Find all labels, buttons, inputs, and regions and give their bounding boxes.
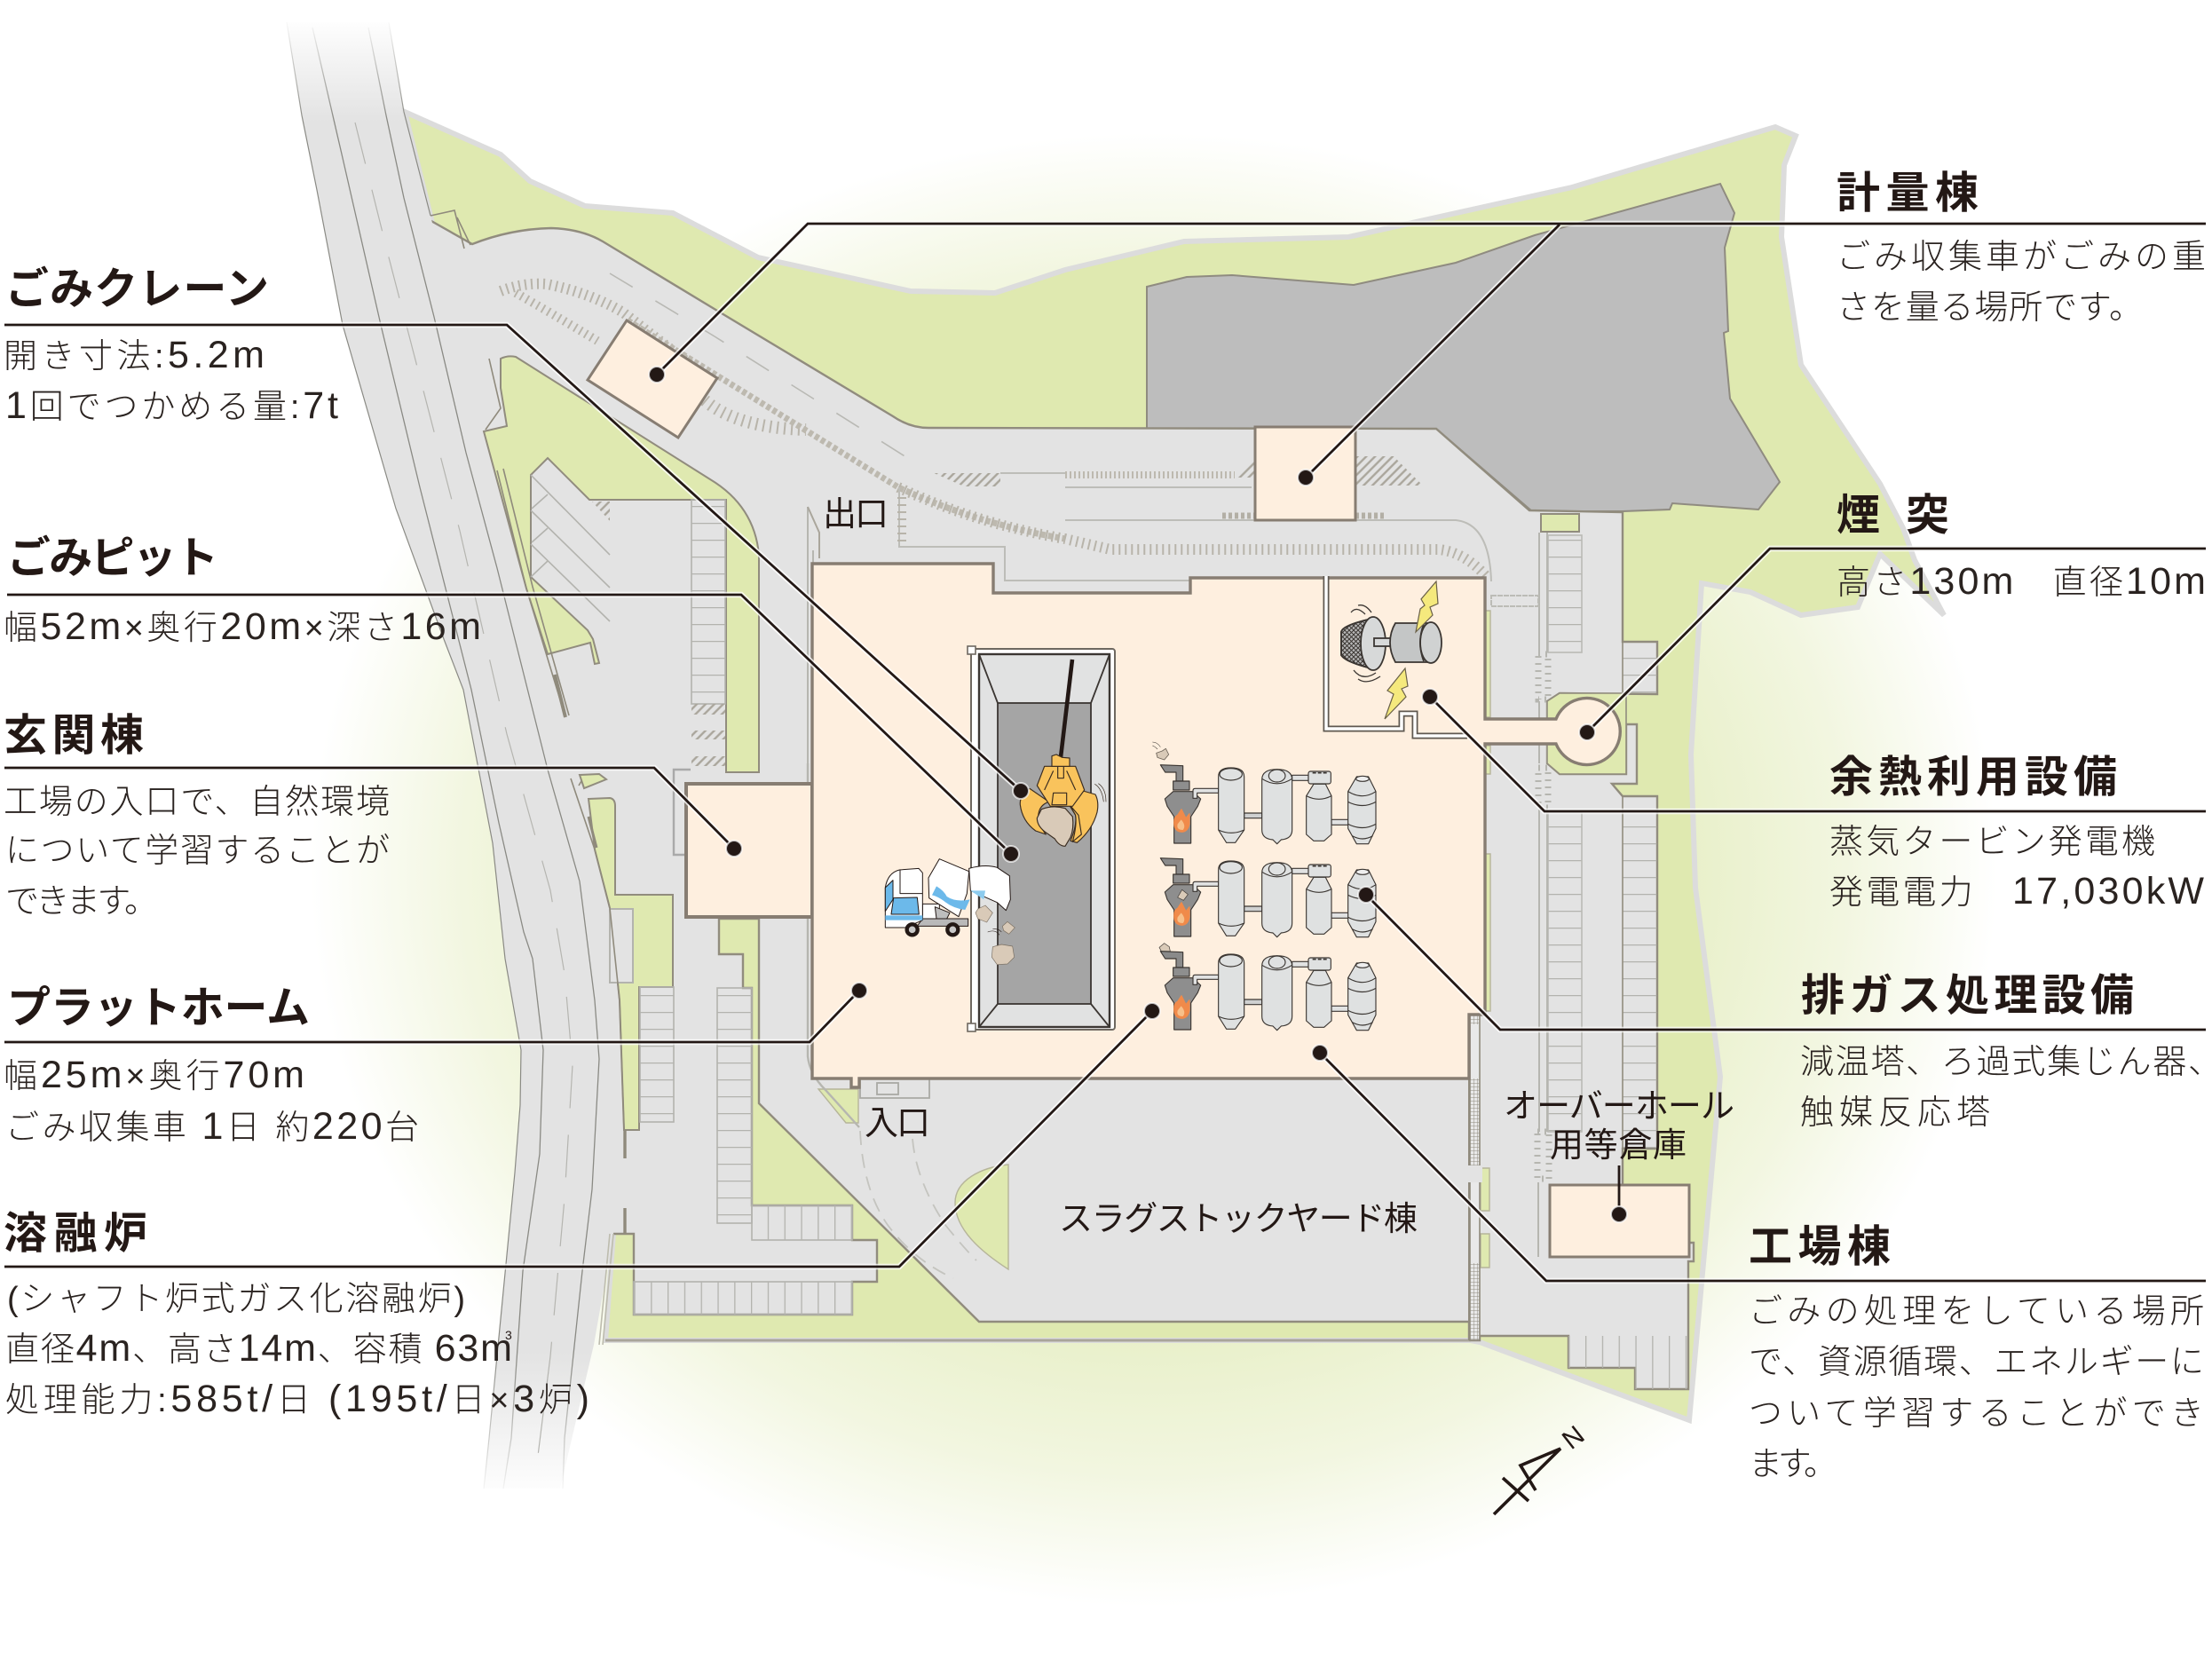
callout: chimney: 高さ130m 直径10m [1837,560,2206,603]
furnace and gas treatment lines [1152,742,1376,1031]
icon: steam turbine and generator [1341,581,1442,719]
west parking [531,475,852,1315]
callout: entrance building: できます。 [5,883,158,920]
map label: entrance: 入口 [865,1105,930,1142]
callout: exhaust gas treatment [1800,972,2212,1132]
callout: waste heat utilisation [1829,754,2204,912]
north arrow: N [1557,1420,1590,1456]
callout: chimney [1837,492,2206,603]
map label: exit: 出口 [823,496,889,533]
chimney island [1547,693,1626,774]
weighing building south [1255,427,1355,520]
callout: melting furnace: 溶融炉 [4,1210,147,1258]
leader dots [649,367,1627,1222]
asphalt yard [1147,184,1780,511]
callout: melting furnace: (シャフト炉式ガス化溶融炉) [7,1281,465,1318]
map label: overhaul warehouse: 用等倉庫 [1550,1127,1687,1165]
paved roads and yards [417,213,1694,1389]
furnace line 2 [1160,858,1376,937]
callout: garbage pit: 幅52m×奥行20m×深さ16m [4,605,481,648]
leader lines [4,224,2206,1281]
callout: waste heat utilisation: 蒸気タービン発電機 [1829,824,2155,861]
callout: garbage crane: 開き寸法:5.2m [4,334,265,376]
entrance building [686,784,812,917]
callout: garbage crane [4,265,338,427]
callout: platform: 幅25m×奥行70m [4,1054,304,1096]
map label: overhaul warehouse: オーバーホール [1504,1088,1734,1126]
callout: factory building: ついて学習することができ [1749,1395,2204,1433]
callout: garbage pit [4,534,481,648]
weighing building north [588,320,717,438]
callout: factory building: で、資源循環、エネルギーに [1749,1344,2204,1381]
small green strips beside buildings [818,611,1490,1269]
steam pipe [1326,576,1467,736]
callout: garbage pit: ごみピット [7,534,218,582]
callout: entrance building: について学習することが [5,833,390,870]
callout: weighing building [1837,170,2206,327]
callout: platform: プラットホーム [7,984,310,1032]
icon: garbage truck [885,859,1015,965]
callout: chimney: 煙 突 [1837,492,1949,540]
map label: overhaul warehouse [1504,1088,1734,1165]
east parking and crossings [1491,533,1688,1389]
callout: weighing building: 計量棟 [1837,170,1979,217]
callout: melting furnace: 処理能力:585t/日 (195t/日×3炉) [5,1378,589,1420]
furnace line 1 [1152,742,1376,844]
furnace line 3 [1159,944,1376,1031]
garbage pit [968,646,1115,1031]
callout: entrance building: 工場の入口で、自然環境 [4,784,390,821]
callout: factory building [1749,1223,2204,1483]
callout: melting furnace: 直径4m、高さ14m、容積 63m [5,1327,512,1370]
callout: platform [4,984,419,1148]
icon: crane grab [1020,754,1106,846]
callout: factory building: ます。 [1749,1446,1837,1483]
callout: factory building: 工場棟 [1749,1223,1891,1271]
callout: exhaust gas treatment: 減温塔、ろ過式集じん器、 [1800,1044,2212,1081]
green islands on the west side [484,356,1579,1130]
callout: garbage crane: ごみクレーン [5,265,269,313]
callout: weighing building: さを量る場所です。 [1837,289,2143,327]
callout: melting furnace: 3 [505,1328,512,1342]
highway [287,22,621,1489]
slag stockyard label: スラグストックヤード棟 [1059,1201,1418,1238]
callout: waste heat utilisation: 発電電力 17,030kW [1829,870,2204,912]
callout: weighing building: ごみ収集車がごみの重 [1837,239,2206,276]
callout: exhaust gas treatment: 排ガス処理設備 [1801,972,2134,1020]
callout: exhaust gas treatment: 触媒反応塔 [1800,1094,1990,1132]
callout: garbage crane: 1回でつかめる量:7t [5,384,338,427]
main factory building [812,564,1620,1087]
walls along the highway [431,210,1471,1345]
road markings [501,273,1491,1340]
entrance apron [860,1078,929,1098]
overhaul warehouse [1550,1185,1689,1257]
callout: entrance building: 玄関棟 [4,712,144,760]
callout: entrance building [4,712,390,920]
leader lines halo [4,224,2206,1281]
crane cable [1061,660,1072,757]
callout: factory building: ごみの処理をしている場所 [1749,1293,2204,1331]
callout: melting furnace [4,1210,589,1420]
callout: platform: ごみ収集車 1日 約220台 [5,1105,419,1148]
north arrow [1494,1420,1590,1514]
east wall strip [1468,1015,1482,1340]
callout: waste heat utilisation: 余熱利用設備 [1829,754,2117,802]
site green area [405,112,1944,1420]
